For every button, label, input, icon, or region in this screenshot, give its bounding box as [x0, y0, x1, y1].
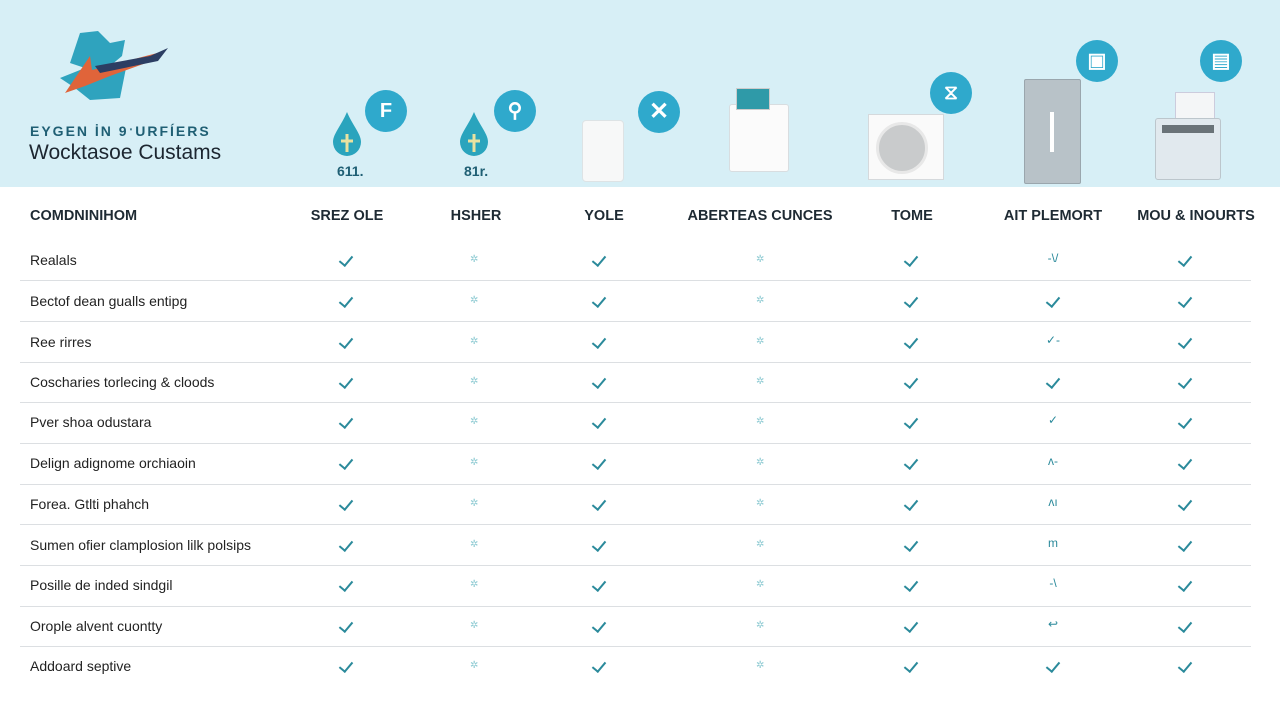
- row 10: Orople alvent cuontty: [30, 618, 162, 634]
- row 9: [30, 576, 1192, 593]
- row 9: Posille de inded sindgil: [30, 577, 172, 593]
- product 5: fan unit: [868, 72, 972, 180]
- product 2: water drop: [460, 90, 536, 179]
- row 11: Addoard septive: [30, 658, 131, 674]
- row 1: -\/: [1048, 251, 1058, 265]
- row 8: [30, 536, 1192, 553]
- row 2: ✲: [470, 295, 478, 306]
- product 1: water drop: F: [380, 100, 392, 122]
- row 1: [30, 251, 1192, 268]
- row 2: Bectof dean gualls entipg: [30, 293, 187, 309]
- column headers: YOLE: [584, 208, 624, 224]
- row 2: ✲: [756, 295, 764, 306]
- row 6: [30, 454, 1192, 471]
- product 2: water drop: 81r.: [464, 163, 488, 179]
- row 7: Forea. Gtlti phahch: [30, 496, 149, 512]
- row 5: [30, 413, 1192, 430]
- logo: [60, 31, 168, 100]
- column headers: MOU & INOURTS: [1137, 208, 1255, 224]
- row 9: ✲: [756, 579, 764, 590]
- row 8: ✲: [756, 539, 764, 550]
- product 2: water drop: ⚲: [508, 100, 522, 122]
- column headers: TOME: [891, 208, 933, 224]
- header band: [0, 0, 1280, 187]
- row 7: ✲: [756, 498, 764, 509]
- row 6: ʌ-: [1048, 454, 1058, 468]
- row 6: ✲: [756, 457, 764, 468]
- row 7: [30, 495, 1192, 512]
- row 3: ✲: [756, 336, 764, 347]
- row 6: ✲: [470, 457, 478, 468]
- row 3: [30, 333, 1192, 350]
- product 7: freezer: ▤: [1212, 50, 1230, 72]
- row 1: ✲: [756, 254, 764, 265]
- row 5: ✓: [1048, 413, 1058, 427]
- row 1: ✲: [470, 254, 478, 265]
- table: [30, 208, 1255, 224]
- row 8: m: [1048, 536, 1058, 550]
- column headers: HSHER: [451, 208, 501, 224]
- product 1: water drop: [333, 90, 407, 179]
- column headers: SREZ OLE: [311, 208, 383, 224]
- row 3: ✓-: [1046, 333, 1060, 347]
- row 9: ✲: [470, 579, 478, 590]
- product 4: washer: [729, 88, 789, 172]
- row 2: [30, 293, 1192, 309]
- row 4: [30, 374, 1192, 390]
- row 5: ✲: [756, 416, 764, 427]
- row 3: ✲: [470, 336, 478, 347]
- row 7: ʌı: [1048, 495, 1058, 509]
- row 8: ✲: [470, 539, 478, 550]
- row 6: Delign adignome orchiaoin: [30, 455, 196, 471]
- row 1: Realals: [30, 252, 77, 268]
- product 6: fridge: ▣: [1088, 50, 1106, 72]
- product 7: freezer: [1155, 40, 1242, 180]
- row 5: ✲: [470, 416, 478, 427]
- row 4: Coscharies torlecing & cloods: [30, 374, 214, 390]
- row 10: ↩: [1048, 617, 1058, 631]
- row 4: ✲: [756, 376, 764, 387]
- row 11: ✲: [756, 660, 764, 671]
- row 3: Ree rirres: [30, 334, 91, 350]
- row 7: ✲: [470, 498, 478, 509]
- row 10: ✲: [756, 620, 764, 631]
- column headers: COMDNINIHOM: [30, 208, 137, 224]
- row 10: [30, 617, 1192, 634]
- row 5: Pver shoa odustara: [30, 414, 151, 430]
- product 3: bin: ✕: [649, 98, 669, 125]
- row 11: ✲: [470, 660, 478, 671]
- row 10: ✲: [470, 620, 478, 631]
- product 1: water drop: 611.: [337, 163, 363, 179]
- product 3: bin: [582, 91, 680, 182]
- title: Wocktasoe Custams: [29, 141, 221, 164]
- column headers: ABERTEAS CUNCES: [687, 208, 833, 224]
- row 8: Sumen ofier clamplosion lilk polsips: [30, 537, 251, 553]
- product 6: fridge: [1024, 40, 1118, 184]
- row 9: -\: [1049, 576, 1057, 590]
- product 5: fan unit: ⧖: [944, 82, 958, 104]
- subtitle: EYGEN İN 9ˑURFÍERS: [30, 123, 211, 139]
- row 4: ✲: [470, 376, 478, 387]
- column headers: AIT PLEMORT: [1004, 208, 1102, 224]
- column headers: [30, 208, 1255, 224]
- row 11: [30, 658, 1192, 674]
